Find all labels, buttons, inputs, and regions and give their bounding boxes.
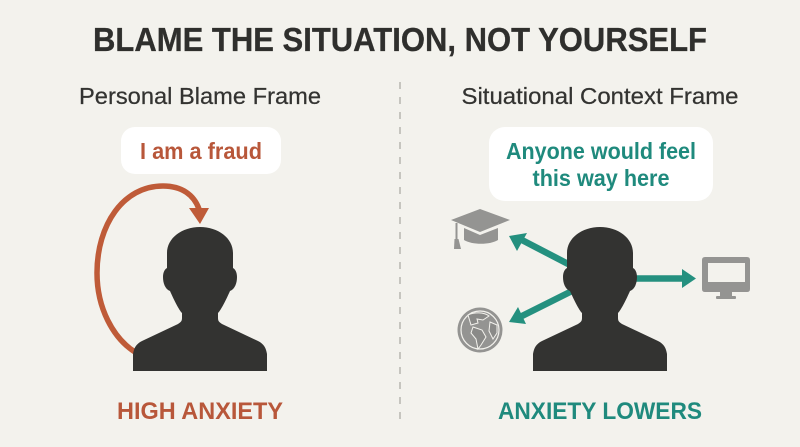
title: BLAME THE SITUATION, NOT YOURSELF: [93, 21, 707, 58]
arrow: to globe: [509, 291, 572, 324]
panel: personal blame frame: [79, 83, 321, 425]
divider: [399, 82, 401, 420]
arrow: self-blame loop: [97, 186, 209, 352]
speech bubble: I am a fraud: I am a fraud: [140, 138, 262, 164]
speech bubble: anyone would feel this way here: [489, 127, 713, 201]
label: anxiety lowers: ANXIETY LOWERS: [498, 398, 702, 425]
heading: personal blame frame: Personal Blame Frame: [79, 83, 321, 109]
icon: globe: [458, 308, 502, 352]
icon: person silhouette: [133, 227, 267, 371]
icon: monitor: [702, 257, 750, 299]
arrow: to monitor: [634, 269, 696, 288]
panel: situational context frame: [451, 83, 750, 425]
icon: person silhouette: [533, 227, 667, 371]
speech bubble: anyone would feel this way here: Anyone would feel: [506, 138, 696, 164]
speech bubble: I am a fraud: [121, 127, 281, 174]
label: high anxiety: HIGH ANXIETY: [117, 398, 283, 425]
icon: graduation cap: [451, 209, 510, 249]
arrow: to graduation cap: [509, 233, 572, 266]
heading: situational context frame: Situational Context Frame: [462, 83, 738, 109]
speech bubble: anyone would feel this way here: this way here: [532, 165, 670, 191]
